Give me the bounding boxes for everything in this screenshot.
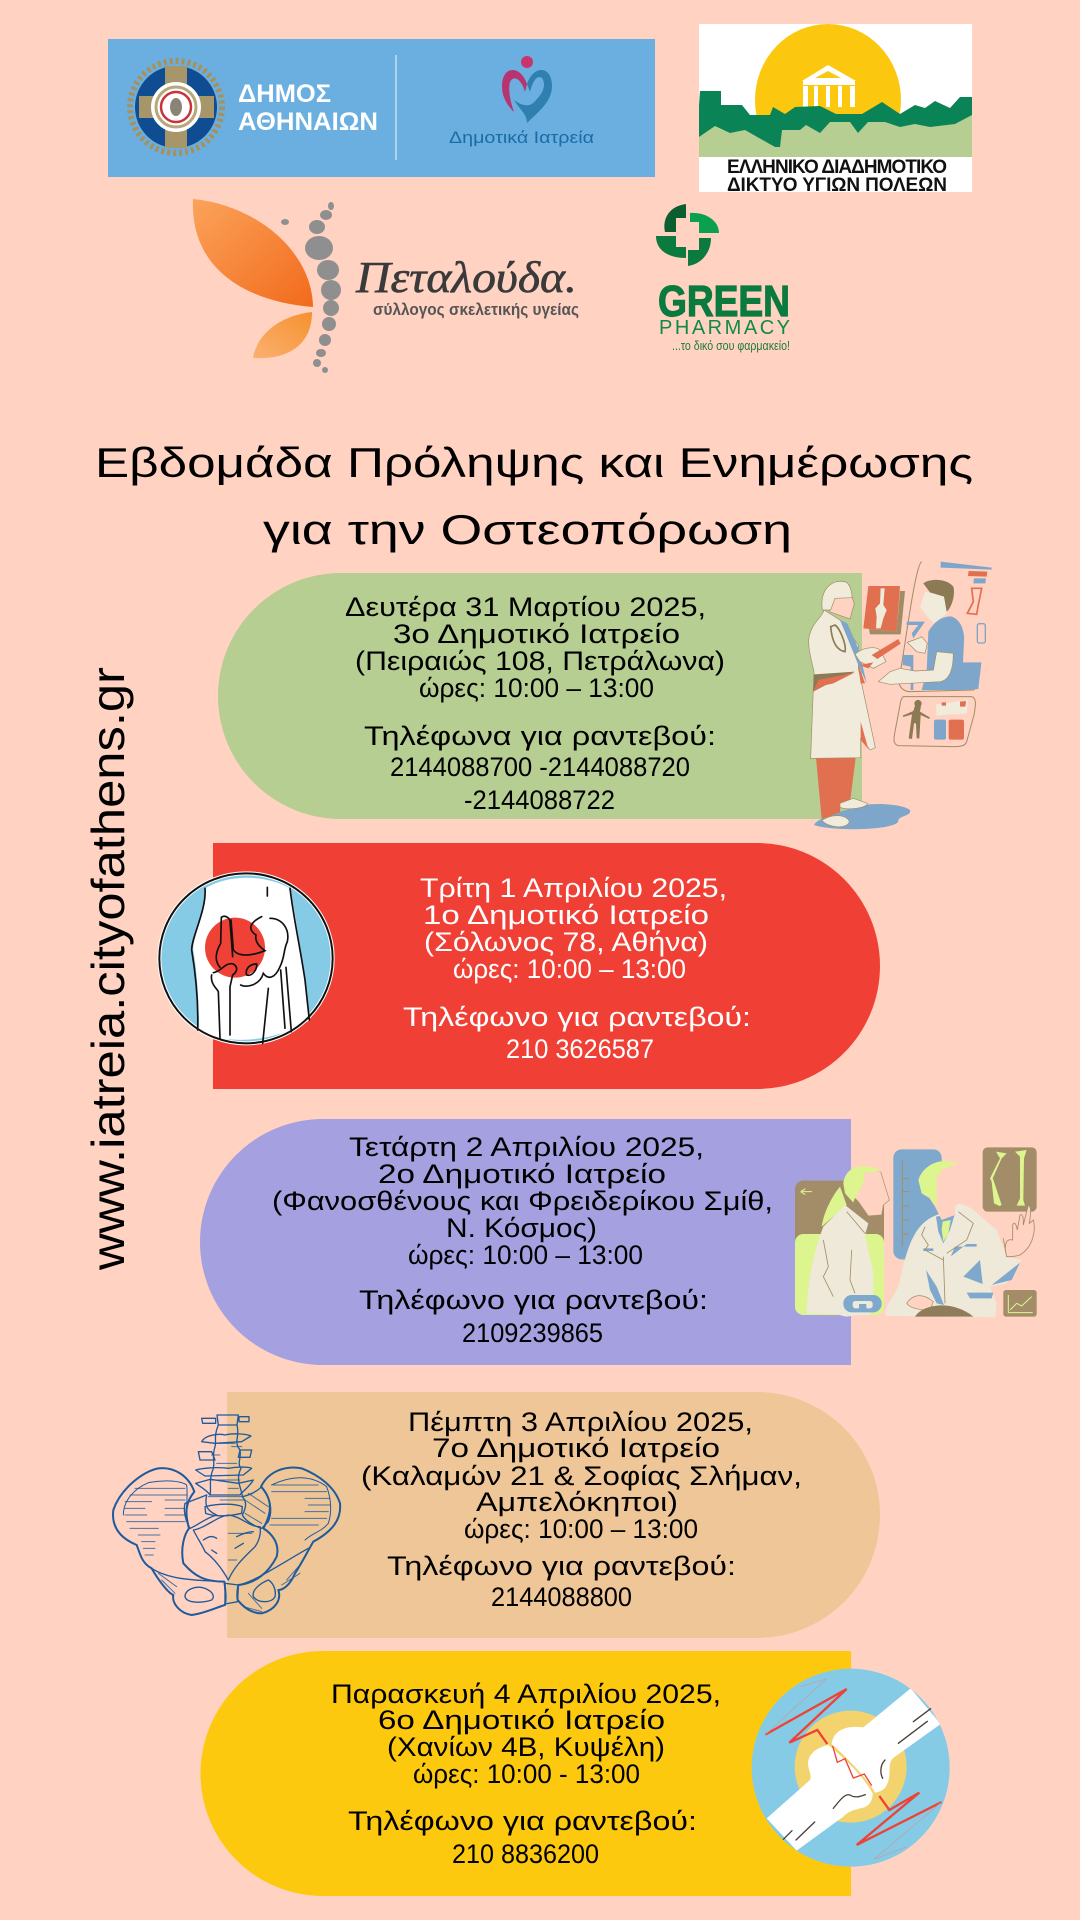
Tuesday clinic details: 1ο Δημοτικό Ιατρείο (423, 900, 709, 930)
Friday clinic details: ώρες: 10:00 - 13:00 (413, 1759, 640, 1789)
Thursday clinic details: 2144088800 (491, 1582, 632, 1612)
Friday clinic details (331, 1679, 721, 1869)
Wednesday clinic details: 2ο Δημοτικό Ιατρείο (378, 1159, 666, 1189)
logo: Hellenic Healthy Cities Network (699, 24, 972, 196)
brand name: GREEN (658, 277, 790, 326)
title: Εβδομάδα Πρόληψης και Ενημέρωσης (95, 439, 973, 486)
icon: heart and hand (502, 56, 552, 123)
Wednesday clinic details: (Φανοσθένους και Φρειδερίκου Σμίθ, (272, 1186, 773, 1216)
network name (727, 157, 947, 196)
Thursday clinic details: 7ο Δημοτικό Ιατρείο (432, 1433, 720, 1463)
panel: Tuesday (213, 843, 880, 1089)
Tuesday clinic details: Τηλέφωνο για ραντεβού: (403, 1002, 751, 1032)
title (95, 439, 973, 553)
logo: Petalouda association (193, 199, 579, 373)
Monday clinic details: -2144088722 (464, 785, 615, 815)
network name: ΕΛΛΗΝΙΚΟ ΔΙΑΔΗΜΟΤΙΚΟ (727, 157, 947, 178)
illustration: two doctors with x-ray (795, 1147, 1037, 1317)
Wednesday clinic details: Ν. Κόσμος) (446, 1213, 597, 1243)
Tuesday clinic details: ώρες: 10:00 – 13:00 (453, 954, 686, 984)
Wednesday clinic details (272, 1132, 773, 1348)
logo: Municipality of Athens and municipal clinics (108, 39, 655, 177)
icon: temple (802, 65, 856, 107)
Thursday clinic details: (Καλαμών 21 & Σοφίας Σλήμαν, (361, 1461, 802, 1491)
association tagline: σύλλογος σκελετικής υγείας (373, 300, 579, 319)
illustration: doctor and patient (809, 562, 992, 829)
Friday clinic details: 6ο Δημοτικό Ιατρείο (378, 1705, 665, 1735)
Thursday clinic details: Τηλέφωνο για ραντεβού: (387, 1551, 736, 1581)
clinics name: Δημοτικά Ιατρεία (449, 128, 594, 147)
Wednesday clinic details: 2109239865 (462, 1318, 603, 1348)
Monday clinic details: Δευτέρα 31 Μαρτίου 2025, (345, 592, 706, 622)
brand descriptor: PHARMACY (659, 317, 790, 339)
Monday clinic details: ώρες: 10:00 – 13:00 (419, 673, 654, 703)
Wednesday clinic details: Τηλέφωνο για ραντεβού: (359, 1285, 708, 1315)
panel: Friday (200, 1651, 851, 1896)
municipality name (238, 80, 378, 136)
Thursday clinic details: ώρες: 10:00 – 13:00 (464, 1514, 698, 1544)
icon: green cross (656, 204, 719, 266)
panel: Monday (218, 573, 862, 819)
skyline (699, 91, 972, 150)
Monday clinic details: 3ο Δημοτικό Ιατρείο (393, 619, 680, 649)
municipality name: ΑΘΗΝΑΙΩΝ (238, 108, 378, 136)
icon: butterfly wings (193, 199, 313, 358)
Monday clinic details: (Πειραιώς 108, Πετράλωνα) (355, 646, 725, 676)
panel: Wednesday (200, 1119, 851, 1365)
website address: www.iatreia.cityofathens.gr (82, 667, 134, 1271)
association name: Πεταλούδα. (355, 253, 577, 302)
Monday clinic details: Τηλέφωνα για ραντεβού: (364, 721, 716, 751)
Thursday clinic details: Αμπελόκηποι) (476, 1487, 678, 1517)
Wednesday clinic details: ώρες: 10:00 – 13:00 (408, 1240, 643, 1270)
network name: ΔΙΚΤΥΟ ΥΓΙΩΝ ΠΟΛΕΩΝ (727, 175, 947, 196)
illustration: bone fracture (752, 1669, 950, 1867)
icon: spine vertebrae (281, 202, 341, 373)
logo: Green Pharmacy (656, 204, 790, 353)
title: για την Οστεοπόρωση (263, 506, 792, 553)
illustration: pelvis and spine (113, 1415, 340, 1615)
Friday clinic details: 210 8836200 (452, 1839, 599, 1869)
Tuesday clinic details: (Σόλωνος 78, Αθήνα) (424, 927, 708, 957)
Tuesday clinic details: Τρίτη 1 Απριλίου 2025, (420, 873, 727, 903)
icon: municipal emblem (130, 61, 222, 153)
Tuesday clinic details (403, 873, 751, 1064)
illustration: painful knee (159, 873, 333, 1043)
Monday clinic details: 2144088700 -2144088720 (390, 752, 690, 782)
Monday clinic details (345, 592, 725, 815)
panel: Thursday (227, 1392, 880, 1638)
Friday clinic details: Τηλέφωνο για ραντεβού: (348, 1806, 697, 1836)
municipality name: ΔΗΜΟΣ (238, 80, 331, 108)
Thursday clinic details (361, 1407, 802, 1612)
Friday clinic details: Παρασκευή 4 Απριλίου 2025, (331, 1679, 721, 1709)
Thursday clinic details: Πέμπτη 3 Απριλίου 2025, (408, 1407, 753, 1437)
Tuesday clinic details: 210 3626587 (506, 1034, 654, 1064)
Wednesday clinic details: Τετάρτη 2 Απριλίου 2025, (349, 1132, 704, 1162)
brand slogan: ...το δικό σου φαρμακείο! (672, 338, 790, 353)
Friday clinic details: (Χανίων 4Β, Κυψέλη) (387, 1732, 665, 1762)
